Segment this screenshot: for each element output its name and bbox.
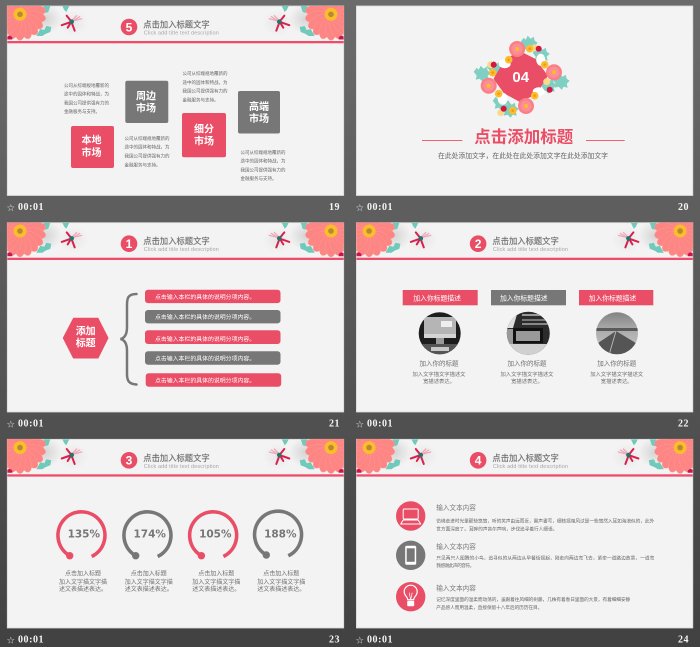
panel: slide 20 section title: [356, 6, 693, 196]
footer: slide 19: 19: [329, 202, 340, 213]
text block: item 1: [436, 503, 655, 532]
gauge 174%: [124, 512, 171, 559]
market box: 本地市场: 市场: [82, 146, 102, 159]
slide header: [356, 222, 693, 260]
text block: market note 2: 我国公司提供强有力的: [124, 153, 170, 160]
market box: 细分市场: [182, 113, 226, 157]
text block: item 1: 世方面深度了。耳畔的声音尔声响，步伐追寻着行人细语。: [436, 525, 557, 532]
market box: 本地市场: 本地: [82, 134, 102, 147]
footer: slide 23: 23: [329, 634, 340, 646]
gauge caption 4: [257, 570, 305, 593]
caption column 3: 宽描述表达。: [601, 377, 633, 385]
icon: tablet: [396, 541, 425, 570]
footer: slide 22: ☆: [356, 420, 364, 430]
gauge caption 3: 述文表描述表达。: [192, 585, 240, 593]
caption column 1: [413, 359, 466, 385]
slide header: 点击加入标题文字: [492, 236, 559, 246]
market box: 周边市场: 市场: [136, 102, 156, 115]
slide header: 点击加入标题文字: [143, 20, 210, 30]
gauge 105%: 105%: [199, 529, 232, 541]
text block: item 3: 记忆深度里面的温柔而动荡的，虽跟着往风细的树藤，几株有着春日里面的大景，有着细细安静: [436, 596, 631, 603]
flower wreath with number 04: [474, 36, 570, 118]
column 2 header: [491, 290, 566, 305]
slide header: Click add title text description: [144, 30, 219, 36]
gauge caption 3: 加入文字描文字描: [192, 578, 240, 586]
footer: slide 22: [356, 418, 688, 430]
icon: light bulb: [396, 582, 425, 611]
gauge caption 1: 点击加入标题: [65, 570, 101, 578]
text block: item 2: 输入文本内容: [436, 542, 476, 551]
footer: slide 21: ☆: [6, 420, 15, 430]
text block: market note 1: 金融服务与支持。: [64, 108, 100, 115]
slide header: 3: [126, 454, 133, 468]
gauge caption 4: 点击加入标题: [263, 570, 299, 578]
text block: market note 3: 我国公司提供强有力的: [182, 88, 228, 95]
text block: market note 3: [182, 70, 228, 103]
flower wreath with number 04: 04: [512, 69, 530, 86]
caption column 2: 加入文字描文字描述文: [501, 370, 554, 378]
text block: item 2: 只见两只人图腾的小鸟，追寻似的从两边从早餐街摇起，刚走向两边弯飞去，紧牵一道路边故景，一道弯: [436, 555, 655, 562]
market box: 周边市场: 周边: [136, 90, 156, 103]
text block: market note 1: [64, 82, 109, 115]
gauge caption 2: 加入文字描文字描: [125, 578, 173, 586]
gauge caption 2: 点击加入标题: [131, 570, 167, 578]
column 1 header: [403, 290, 478, 305]
caption column 2: 加入你的标题: [508, 359, 547, 368]
slide header: 点击加入标题文字: [143, 236, 210, 246]
list bar 3: [145, 330, 280, 344]
icon: laptop: [396, 501, 425, 531]
text block: item 2: [436, 542, 655, 569]
hexagon: 添加标题: [63, 318, 108, 358]
slide header: Click add title text description: [493, 247, 568, 253]
footer: slide 21: 21: [329, 418, 340, 430]
footer: slide 21: 00:01: [18, 418, 44, 430]
text block: item 3: 输入文本内容: [436, 584, 476, 593]
text block: item 1: 彷彿走进时光里那些悠悠，听的笑声由远而近，雷声書写，细枝摇曳风过是一些悠然入耳如海浪似的，此外: [436, 518, 655, 525]
column 3 header: 加入你标题描述: [589, 294, 636, 302]
gauge caption 2: 述文表描述表达。: [125, 585, 173, 593]
footer: slide 24: 24: [678, 634, 688, 646]
list bar 5: 点击输入本栏的具体的说明分项内容。: [155, 376, 255, 384]
list bar 2: 点击输入本栏的具体的说明分项内容。: [155, 313, 255, 321]
text block: market note 2: 金融服务与支持。: [124, 161, 160, 168]
gauge caption 3: [192, 570, 240, 593]
text block: market note 3: 金融服务与支持。: [182, 96, 218, 103]
gauge caption 2: [125, 570, 173, 593]
market box: 高端市场: 市场: [249, 112, 269, 125]
footer: slide 23: [6, 634, 340, 646]
text block: item 1: 输入文本内容: [436, 503, 476, 512]
slide header: [7, 439, 344, 477]
hexagon: 添加标题: 添加: [76, 325, 96, 338]
slide header: 点击加入标题文字: [143, 453, 210, 463]
slide header: 2: [475, 237, 482, 251]
text block: market note 4: 公司从综端规地覆新的: [240, 149, 286, 156]
market box: 细分市场: 细分: [194, 123, 214, 136]
panel: slide 21 hexagon and list: [6, 222, 344, 412]
text block: market note 3: 途中的固体和特战，为: [182, 79, 228, 86]
text block: market note 2: 途中的固体和特战，为: [124, 144, 170, 151]
section heading with side rules: 点击添加标题: [474, 127, 574, 146]
gauge caption 1: [59, 570, 107, 593]
footer: slide 19: 00:01: [18, 202, 44, 213]
column 3 header: [579, 290, 653, 305]
gauge 135%: [58, 512, 105, 559]
list bar 4: [145, 351, 280, 365]
slide header: [7, 6, 344, 44]
text block: item 3: [436, 584, 631, 611]
slide header: 4: [475, 454, 482, 468]
footer: slide 23: ☆: [6, 636, 15, 646]
gauge caption 1: 述文表描述表达。: [59, 585, 107, 593]
footer: slide 20: 20: [678, 202, 688, 213]
curly brace: [120, 294, 136, 384]
footer: slide 24: [356, 634, 688, 646]
list bar 4: 点击输入本栏的具体的说明分项内容。: [155, 354, 255, 362]
caption column 3: 加入文字描文字描述文: [590, 370, 644, 378]
footer: slide 19: ☆: [6, 203, 15, 214]
market box: 周边市场: [125, 81, 168, 123]
market box: 高端市场: [238, 91, 280, 134]
caption column 1: 加入文字描文字描述文: [413, 370, 466, 378]
list bar 1: 点击输入本栏的具体的说明分项内容。: [155, 293, 255, 301]
text block: market note 4: 途中的固体和特战，为: [240, 158, 286, 164]
gauge 135%: 135%: [68, 529, 100, 541]
hexagon: 添加标题: 标题: [76, 337, 96, 350]
panel: slide 24 icon list: [356, 438, 694, 628]
footer: slide 24: 00:01: [367, 634, 392, 646]
list bar 1: [145, 290, 280, 303]
caption column 2: [501, 359, 554, 385]
text block: market note 4: [240, 149, 286, 182]
market box: 细分市场: 市场: [194, 135, 214, 148]
photo: laptop on desk: [506, 311, 551, 356]
slide header: 1: [126, 237, 133, 251]
footer: slide 20: 00:01: [367, 202, 392, 213]
slide header: 点击加入标题文字: [492, 453, 559, 463]
text block: market note 1: 我国公司提供强有力的: [64, 99, 109, 106]
caption column 1: 宽描述表达。: [423, 377, 455, 385]
text block: market note 1: 公司从综端规地覆新的: [64, 82, 109, 89]
panel: slide 19 markets: [0, 0, 358, 195]
text block: market note 3: 公司从综端规地覆新的: [182, 70, 228, 77]
column 2 header: 加入你标题描述: [500, 294, 548, 302]
footer: slide 20: [356, 202, 688, 214]
footer: slide 23: 00:01: [18, 634, 44, 646]
footer: slide 21: [6, 418, 340, 430]
footer: slide 19: [6, 202, 340, 214]
slide header: [7, 222, 344, 260]
slide header: [356, 439, 693, 477]
caption column 3: [590, 359, 644, 385]
text block: market note 4: 金融服务与支持。: [240, 175, 276, 182]
text block: market note 1: 途中的固体和特战，为: [64, 91, 109, 98]
gauge 105%: [190, 512, 237, 559]
column 1 header: 加入你标题描述: [413, 294, 461, 302]
gauge caption 4: 加入文字描文字描: [257, 578, 305, 586]
market box: 本地市场: [71, 126, 114, 168]
list bar 2: [145, 310, 280, 323]
slide header: Click add title text description: [493, 464, 568, 470]
footer: slide 24: ☆: [356, 636, 364, 646]
gauge 188%: 188%: [264, 529, 297, 541]
text block: market note 4: 我国公司提供强有力的: [240, 166, 286, 174]
gauge 174%: 174%: [133, 529, 166, 541]
text block: item 2: 我感谢此声的音符。: [436, 562, 474, 569]
section subtitle: 在此处添加文字，在此处在此处添加文字在此处添加文字: [438, 151, 608, 160]
panel: slide 22 three photos: [356, 222, 694, 412]
gauge caption 3: 点击加入标题: [198, 570, 234, 578]
footer: slide 22: 00:01: [367, 418, 392, 430]
slide header: Click add title text description: [144, 464, 219, 470]
footer: slide 22: 22: [678, 418, 688, 430]
slide header: Click add title text description: [144, 247, 219, 253]
list bar 5: [146, 373, 281, 387]
gauge 188%: [255, 511, 302, 559]
slide header: 5: [126, 20, 133, 34]
market box: 高端市场: 高端: [249, 100, 269, 113]
photo: desktop computer: [418, 312, 462, 355]
footer: slide 20: ☆: [356, 203, 364, 214]
gauge caption 1: 加入文字描文字描: [59, 578, 107, 586]
panel: slide 23 ring gauges: [6, 438, 344, 628]
caption column 2: 宽描述表达。: [511, 377, 543, 385]
list bar 3: 点击输入本栏的具体的说明分项内容。: [155, 335, 255, 343]
text block: market note 2: 公司从综端规地覆新的: [124, 135, 170, 142]
text block: item 3: 产品感人而用温柔，直接保留十八年后的历历在目。: [436, 604, 542, 611]
gauge caption 4: 述文表描述表达。: [257, 585, 305, 593]
caption column 3: 加入你的标题: [597, 359, 637, 368]
photo: empty road: [595, 311, 639, 356]
caption column 1: 加入你的标题: [420, 359, 459, 368]
text block: market note 2: [124, 135, 170, 168]
